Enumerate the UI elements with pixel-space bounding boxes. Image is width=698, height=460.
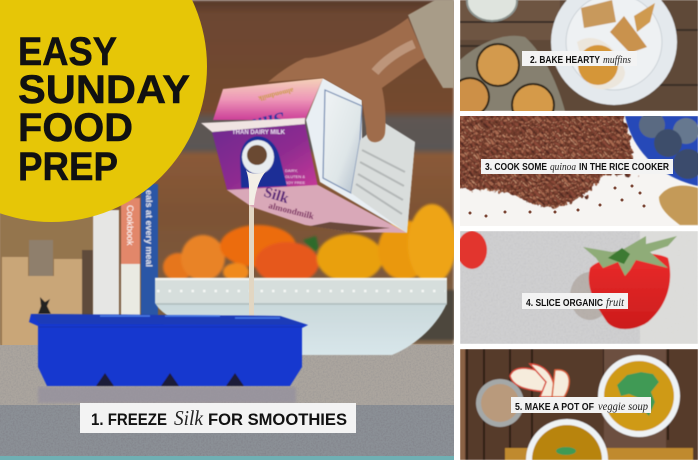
books [93,184,158,316]
wood table [460,0,698,111]
soup herbs [617,372,659,416]
caption 3: quinoa [550,161,576,173]
sleeve [408,0,454,88]
muffin tin [460,36,565,111]
yellow title circle [0,0,207,222]
wood planks [460,349,698,460]
plate [551,0,677,105]
caption 5: veggie soup [598,399,648,413]
title: PREP [18,145,118,189]
spout [240,136,287,188]
second bowl of soup [526,419,608,460]
walnut [659,186,698,225]
milk carton: almondmilk [257,86,294,103]
milk carton: SOY FREE [285,180,305,185]
milk carton: THAN DAIRY MILK [232,130,286,136]
panel: cook quinoa [460,116,698,226]
panel: main photo of pouring Silk into ice tray [0,0,456,460]
milk carton: Silk [250,107,287,136]
muffins in tin [476,43,520,87]
title: FOOD [18,106,133,150]
tray reflection [38,387,296,403]
white bowl [155,279,447,355]
blue ice cube tray [29,314,308,386]
carton top [213,78,323,120]
caption 5 [511,397,651,413]
caption 1 [80,403,356,433]
carton side panel [306,78,415,233]
cloth behind bowl [415,290,454,340]
muffin on plate [577,38,625,89]
background wall [0,0,454,345]
hand [268,0,454,142]
quinoa pile [450,106,635,207]
counter top [0,345,454,405]
caption 4: 4. SLICE ORGANIC [526,297,603,309]
cutting board [604,349,666,449]
panel: bake muffins [460,0,698,111]
caption 2 [522,51,637,66]
blue bowl of blueberries [625,112,698,186]
caption 2: 2. BAKE HEARTY [530,54,600,66]
milk carton: DAIRY, [285,168,298,173]
marble [460,231,698,344]
carton bottom [227,185,407,233]
milk carton: almondmilk [268,200,315,221]
caption 1: Silk [174,406,204,430]
caption 1: 1. FREEZE [91,411,167,429]
bell peppers [163,204,456,284]
caption 4 [522,293,628,309]
title: EASY [18,30,117,74]
caption 3: 3. COOK SOME [485,161,547,173]
caption 1: FOR SMOOTHIES [208,411,347,429]
books: Cookbook [125,205,135,246]
caption 4: fruit [606,295,625,309]
apple slices [510,368,553,392]
title [18,30,190,189]
wooden knife block [0,213,93,346]
caption 2: muffins [603,54,631,66]
small strawberry [457,231,487,269]
milk glass [467,0,517,21]
counter edge [0,405,454,456]
milk carton [201,78,415,233]
caption 3: IN THE RICE COOKER [579,161,669,173]
carton front [212,124,318,190]
panel: veggie soup [460,349,698,460]
yellow cloth [505,448,693,460]
books: eals at every meal [144,190,154,267]
pouring milk over carton [246,170,267,205]
caption 3 [481,159,673,174]
milk stream [249,200,254,316]
milk carton: GLUTEN & [285,174,305,179]
strawberry leaves [583,236,677,276]
shadow [570,272,602,320]
bowl of soup [598,355,680,437]
large strawberry [589,253,670,329]
milk carton: Silk [262,185,291,207]
panel: slice fruit [457,231,698,344]
scattered quinoa [468,184,646,218]
title: SUNDAY [18,68,190,112]
caption 5: 5. MAKE A POT OF [515,401,594,413]
spice dish [476,379,524,427]
scones [581,0,616,28]
